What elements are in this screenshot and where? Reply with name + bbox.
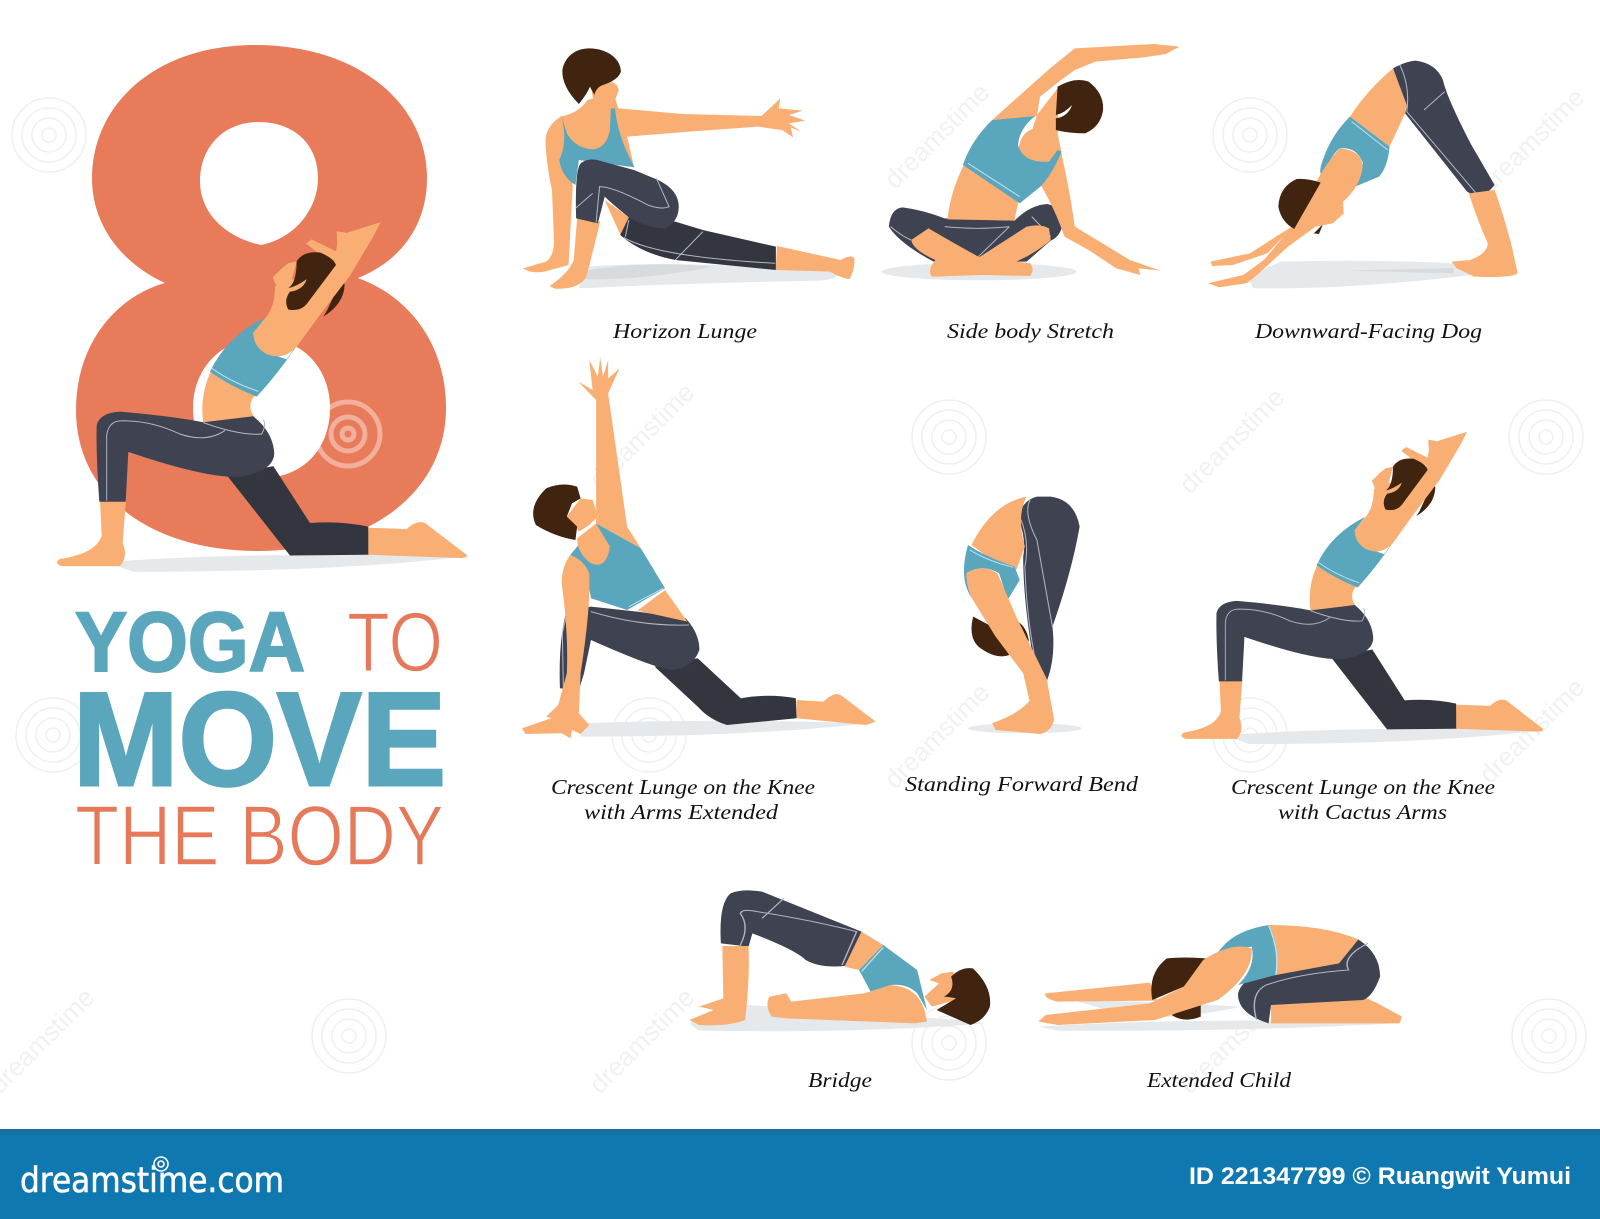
- title: YOGA TO MOVE THE BODY: [73, 595, 446, 884]
- back hair: [323, 279, 345, 317]
- hair: [562, 48, 621, 104]
- sports top: [1320, 117, 1390, 187]
- far arm: [1210, 225, 1295, 266]
- caption: Horizon Lunge: Horizon Lunge: [612, 319, 757, 343]
- shadow: [968, 723, 1082, 733]
- text: dreamstime: [1173, 982, 1290, 1099]
- leggings seams: [891, 217, 1051, 257]
- near arm: [1208, 148, 1363, 287]
- caption: Downward-Facing Dog: Downward-Facing Dog: [1254, 319, 1482, 343]
- sports top: [559, 108, 635, 185]
- shadow: [581, 721, 868, 737]
- hair: [1278, 179, 1321, 229]
- sports top: [210, 318, 303, 397]
- pose: Crescent Lunge with Cactus Arms: [1182, 432, 1544, 744]
- raised arm: [578, 357, 641, 548]
- sports top: [859, 945, 927, 1010]
- raised arm: [992, 44, 1180, 120]
- far hand: [306, 239, 338, 263]
- main figure: crescent lunge with cactus arms on the 8: [57, 222, 468, 572]
- text: dreamstime: [583, 982, 700, 1099]
- leggings seams: [575, 178, 775, 263]
- leggings: [620, 217, 776, 270]
- face: [924, 972, 956, 1007]
- back foot: [368, 522, 467, 558]
- raised arm: [253, 222, 381, 356]
- pose: Downward-Facing Dog: [1208, 61, 1518, 288]
- hair: [1056, 80, 1103, 133]
- caption: Crescent Lunge on the Knee with Cactus Arms: Crescent Lunge on the Knee: [1231, 775, 1495, 799]
- torso: [202, 372, 262, 423]
- text: dreamstime: [1473, 672, 1590, 789]
- leggings: [1393, 61, 1495, 198]
- pose: Extended Child: [1038, 925, 1402, 1031]
- caption: Standing Forward Bend: Standing Forward Bend: [905, 772, 1139, 796]
- caption: Bridge: Bridge: [808, 1068, 872, 1092]
- torso: [1350, 68, 1407, 147]
- lower arm: [1019, 128, 1160, 275]
- caption: Extended Child: Extended Child: [1146, 1068, 1292, 1092]
- near arm: [1038, 947, 1252, 1025]
- sports top: [963, 115, 1062, 203]
- far arm: [1045, 983, 1157, 1002]
- leggings seams: [1254, 943, 1368, 1020]
- hair: [971, 617, 1029, 656]
- caption: Crescent Lunge on the Knee with Arms Extended: with Arms Extended: [584, 800, 779, 824]
- leggings: [1238, 939, 1380, 1023]
- hair: [286, 252, 336, 310]
- skin gap behind knee: [605, 200, 631, 236]
- lower leg and foot: [1452, 190, 1518, 277]
- footer logo: dreamstime.com: dreamstime.com: [20, 1161, 284, 1201]
- caption: Side body Stretch: Side body Stretch: [947, 319, 1114, 343]
- outstretched arm and back: [560, 93, 805, 167]
- caption: Crescent Lunge on the Knee with Cactus Arms: with Cactus Arms: [1278, 800, 1447, 824]
- footer bar: [0, 1129, 1600, 1219]
- shadow: [1247, 261, 1470, 288]
- torso: [971, 497, 1027, 570]
- torso: [637, 590, 687, 622]
- lower legs: [1271, 997, 1402, 1023]
- torso: [947, 163, 1020, 221]
- shadow: [1038, 1000, 1392, 1031]
- leg and feet: [992, 680, 1054, 734]
- front shin and foot: [57, 500, 126, 566]
- shadow: [882, 263, 1077, 280]
- TO: TO: [347, 595, 443, 689]
- leggings seams: [740, 898, 857, 965]
- lower leg and foot: [776, 246, 854, 279]
- big number 8: [76, 45, 446, 551]
- text: dreamstime: [1473, 82, 1590, 199]
- neck and face: [1030, 88, 1058, 145]
- hair behind: [1314, 224, 1323, 234]
- arm leg and foot: [689, 946, 749, 1025]
- crossed legs: [911, 228, 1033, 277]
- face: [591, 78, 619, 107]
- hair: [937, 968, 990, 1025]
- back leg: [227, 466, 369, 555]
- back foot: [797, 694, 876, 725]
- leggings seams: [1020, 500, 1052, 677]
- pose: Horizon Lunge: [523, 48, 854, 289]
- text: dreamstime: [583, 377, 700, 494]
- leggings seams: [562, 612, 689, 688]
- hair: [1151, 957, 1206, 1020]
- footer credit: ID 221347799 © Ruangwit Yumui: [1189, 1163, 1571, 1190]
- hair: [533, 485, 581, 540]
- MOVE: MOVE: [73, 666, 446, 814]
- leggings: [720, 890, 861, 966]
- caption: Crescent Lunge on the Knee with Arms Extended: [551, 775, 815, 824]
- leggings: [889, 204, 1063, 262]
- sports top: [964, 545, 1020, 600]
- leggings seams: [1400, 65, 1479, 197]
- arm: [966, 568, 1049, 707]
- text: dreamstime: [878, 77, 995, 194]
- supporting arm: [522, 555, 589, 738]
- arm and hand: [767, 985, 927, 1023]
- supporting arm: [523, 116, 573, 272]
- pose: Side body Stretch: [882, 44, 1180, 280]
- face: [567, 498, 598, 532]
- front thigh: [560, 607, 699, 690]
- shadow: [689, 1005, 985, 1031]
- leggings seams: [107, 420, 265, 501]
- watermark spiral on the 8: [316, 402, 380, 466]
- text: dreamstime: [878, 677, 995, 794]
- pose: Bridge: [689, 890, 990, 1031]
- caption: Crescent Lunge on the Knee with Arms Extended: Crescent Lunge on the Knee: [551, 775, 815, 799]
- pose: Standing Forward Bend: [964, 497, 1082, 734]
- face: [273, 261, 297, 290]
- leggings: [1018, 497, 1080, 680]
- YOGA: YOGA: [75, 595, 305, 689]
- neck and back: [577, 523, 610, 565]
- caption: Crescent Lunge on the Knee with Cactus Arms: [1231, 775, 1495, 824]
- shadow: [579, 264, 838, 288]
- front thigh and hip: [97, 412, 274, 502]
- floor shadow: [107, 555, 468, 572]
- sports top: [570, 523, 665, 610]
- sports top: [1203, 925, 1277, 985]
- torso: [844, 932, 883, 970]
- text: dreamstime: [1173, 382, 1290, 499]
- pose: Crescent Lunge with Arms Extended: [522, 357, 876, 738]
- THE BODY: THE BODY: [75, 789, 444, 884]
- icon: logo spiral: [154, 1157, 168, 1171]
- back leg: [655, 658, 797, 725]
- front shin and hand: [550, 218, 600, 289]
- back: [1269, 925, 1358, 975]
